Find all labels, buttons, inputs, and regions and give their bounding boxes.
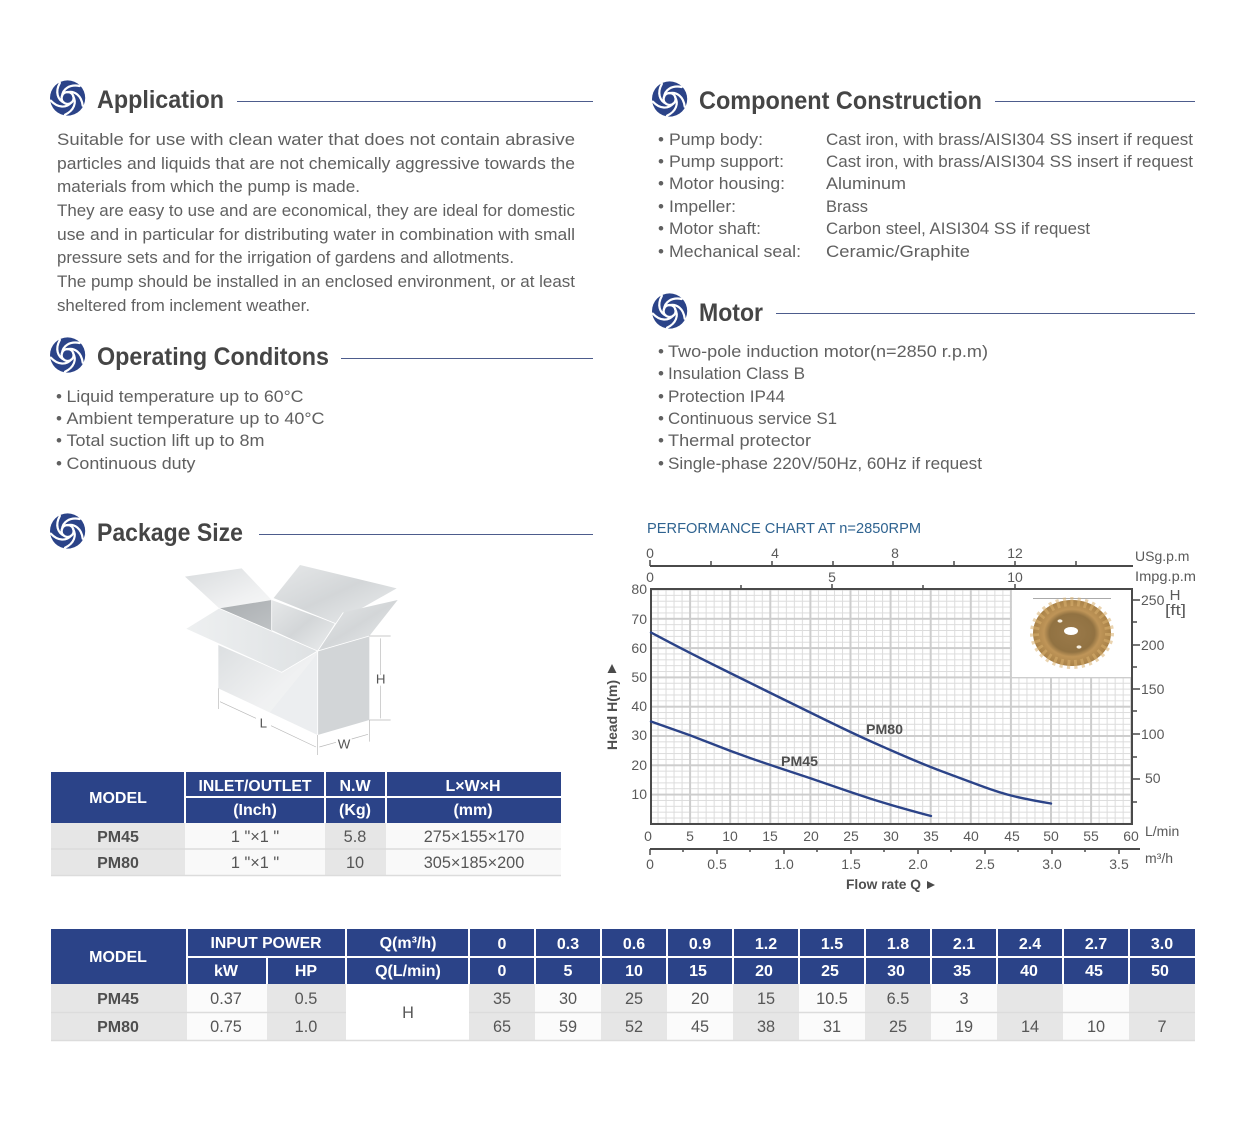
axis: flow in L/min: 0 bbox=[644, 828, 652, 844]
axis: flow in L/min: 30 bbox=[883, 828, 899, 844]
curve: PM45: PM45 bbox=[781, 753, 818, 769]
table: package dimensions: 10 bbox=[346, 854, 364, 872]
panel: motor bbox=[652, 293, 1195, 473]
table: performance data: 2.7 bbox=[1085, 936, 1107, 953]
heading: application: Application bbox=[97, 86, 224, 114]
table: performance data: 45 bbox=[691, 1018, 709, 1036]
axis: head in feet: 200 bbox=[1141, 637, 1165, 653]
table: performance data: 0 bbox=[498, 963, 507, 980]
list: components: Pump support: bbox=[669, 152, 784, 171]
table: performance data: 1.2 bbox=[755, 936, 777, 953]
table: performance data: 20 bbox=[755, 963, 773, 980]
list: components: Pump body: bbox=[669, 130, 763, 149]
table: performance data: 0.37 bbox=[210, 990, 242, 1008]
axis: head in feet: 250 bbox=[1141, 592, 1165, 608]
table: performance data: 10.5 bbox=[816, 990, 848, 1008]
axis: head in metres: Head H(m) bbox=[604, 680, 620, 750]
axis: USg.p.m: USg.p.m bbox=[1135, 548, 1189, 564]
list: motor: • bbox=[658, 364, 664, 383]
text block: application description: Suitable for use with clean water that does not contain abrasive bbox=[57, 130, 575, 149]
list: operating conditions: Ambient temperature up to 40°C bbox=[66, 409, 324, 428]
axis: flow in L/min: 20 bbox=[803, 828, 819, 844]
table: package dimensions: (mm) bbox=[453, 802, 493, 819]
list: operating conditions: • bbox=[56, 431, 62, 450]
table: performance data: 65 bbox=[493, 1018, 511, 1036]
table: performance data: 2.4 bbox=[1019, 936, 1041, 953]
table: performance data: 1.5 bbox=[821, 936, 843, 953]
table: package dimensions bbox=[51, 772, 561, 876]
table: package dimensions: PM45 bbox=[97, 829, 139, 846]
table: performance data: PM80 bbox=[97, 1019, 139, 1036]
axis: flow in m3/h bbox=[646, 849, 1173, 892]
list: operating conditions: Liquid temperature up to 60°C bbox=[66, 387, 304, 406]
table: package dimensions: 1 "×1 " bbox=[231, 854, 279, 872]
icon: motor logo bbox=[652, 293, 687, 329]
axis: head in metres bbox=[604, 581, 647, 802]
list: components: Carbon steel, AISI304 SS if request bbox=[826, 219, 1090, 238]
table: performance data: 38 bbox=[757, 1018, 775, 1036]
axis: Impg.p.m bbox=[646, 568, 1196, 589]
table: performance data: INPUT POWER bbox=[210, 935, 322, 952]
list: components: • bbox=[658, 130, 664, 149]
table: performance data: 52 bbox=[625, 1018, 643, 1036]
list: components: Cast iron, with brass/AISI304 SS insert if request bbox=[826, 130, 1193, 149]
list: motor: Continuous service S1 bbox=[668, 409, 837, 428]
axis: head in metres: 70 bbox=[631, 611, 647, 627]
table: package dimensions: 275×155×170 bbox=[424, 828, 524, 846]
axis: flow in m3/h: 2.0 bbox=[908, 856, 928, 872]
list: components: Motor housing: bbox=[669, 174, 785, 193]
text block: application description bbox=[57, 130, 575, 315]
curve: PM45 bbox=[651, 722, 931, 816]
table: package dimensions: INLET/OUTLET bbox=[198, 778, 312, 795]
list: components bbox=[658, 130, 1193, 261]
panel: application bbox=[50, 80, 593, 315]
icon: operating conditions logo bbox=[50, 337, 85, 373]
axis: flow in L/min: 40 bbox=[963, 828, 979, 844]
table: performance data: 3.0 bbox=[1151, 936, 1173, 953]
list: motor: • bbox=[658, 342, 664, 361]
table: performance data: 35 bbox=[493, 990, 511, 1008]
axis: Impg.p.m: 10 bbox=[1007, 569, 1023, 585]
text block: application description: pressure sets and for the irrigation of gardens and allotments. bbox=[57, 248, 514, 267]
table: performance data: 0.6 bbox=[623, 936, 645, 953]
list: motor: • bbox=[658, 409, 664, 428]
table: package dimensions: (Kg) bbox=[339, 802, 371, 819]
chart grid bbox=[650, 589, 1132, 824]
list: components: • bbox=[658, 197, 664, 216]
list: operating conditions: • bbox=[56, 409, 62, 428]
text block: application description: use and in particular for distributing water in combination with small bbox=[57, 225, 575, 244]
axis: flow in L/min: 25 bbox=[843, 828, 859, 844]
table: performance data: 1.8 bbox=[887, 936, 909, 953]
list: components: • bbox=[658, 219, 664, 238]
axis: USg.p.m: 4 bbox=[771, 545, 779, 561]
axis: head in feet: [ft] bbox=[1165, 602, 1186, 619]
list: components: Mechanical seal: bbox=[669, 242, 801, 261]
panel: performance chart bbox=[604, 520, 1196, 892]
icon: package size logo bbox=[50, 513, 85, 549]
list: components: Motor shaft: bbox=[669, 219, 761, 238]
axis: flow in m3/h: 1.0 bbox=[774, 856, 794, 872]
table: performance data: 31 bbox=[823, 1018, 841, 1036]
icon: component construction logo bbox=[652, 81, 687, 117]
table: performance data: 50 bbox=[1151, 963, 1169, 980]
axis: head in metres: 50 bbox=[631, 669, 647, 685]
table: performance data: 10 bbox=[1087, 1018, 1105, 1036]
text block: application description: They are easy to use and are economical, they are ideal for domestic bbox=[57, 201, 575, 220]
table: package dimensions: 1 "×1 " bbox=[231, 828, 279, 846]
list: components: • bbox=[658, 174, 664, 193]
table: performance data: 45 bbox=[1085, 963, 1103, 980]
plot frame bbox=[651, 589, 1132, 824]
table: package dimensions: 5.8 bbox=[344, 828, 366, 846]
axis: flow in L/min: 35 bbox=[923, 828, 939, 844]
table: performance data: 20 bbox=[691, 990, 709, 1008]
axis: Impg.p.m: 0 bbox=[646, 569, 654, 585]
axis: USg.p.m bbox=[646, 545, 1189, 566]
heading: package size: Package Size bbox=[97, 519, 243, 547]
axis: head in feet: 150 bbox=[1141, 681, 1165, 697]
icon: application logo bbox=[50, 80, 85, 116]
list: motor: Single-phase 220V/50Hz, 60Hz if request bbox=[668, 454, 982, 473]
table: performance data: H bbox=[402, 1004, 414, 1022]
table: performance data: 25 bbox=[889, 1018, 907, 1036]
table: performance data: 0 bbox=[498, 936, 507, 953]
list: operating conditions: • bbox=[56, 387, 62, 406]
heading: operating conditions: Operating Conditons bbox=[97, 343, 329, 371]
axis: flow in L/min: 50 bbox=[1043, 828, 1059, 844]
list: motor: Insulation Class B bbox=[668, 364, 805, 383]
axis: flow in L/min: L/min bbox=[1145, 823, 1179, 839]
axis: Impg.p.m: 5 bbox=[828, 569, 836, 585]
table: performance data: 35 bbox=[953, 963, 971, 980]
table: performance data: 25 bbox=[821, 963, 839, 980]
heading: motor: Motor bbox=[699, 299, 763, 327]
table: performance data: Q(m³/h) bbox=[380, 935, 436, 952]
table: performance data: 15 bbox=[689, 963, 707, 980]
axis: head in feet: H bbox=[1170, 587, 1180, 604]
list: components: Ceramic/Graphite bbox=[826, 242, 970, 261]
table: package dimensions: N.W bbox=[339, 778, 371, 795]
table: performance data: 1.0 bbox=[295, 1018, 317, 1036]
impeller photo bbox=[1012, 590, 1132, 677]
text block: application description: materials from which the pump is made. bbox=[57, 177, 360, 196]
list: motor: Protection IP44 bbox=[668, 387, 785, 406]
axis: head in metres: 20 bbox=[631, 757, 647, 773]
table: performance data: 0.9 bbox=[689, 936, 711, 953]
table: performance data: 14 bbox=[1021, 1018, 1039, 1036]
icon: open cardboard box with dimensions: L bbox=[260, 716, 267, 731]
axis: flow in L/min: 45 bbox=[1004, 828, 1020, 844]
text block: application description: particles and liquids that are not chemically aggressive towards the bbox=[57, 154, 575, 173]
list: motor: • bbox=[658, 454, 664, 473]
list: components: Impeller: bbox=[669, 197, 736, 216]
table: performance data: 6.5 bbox=[887, 990, 909, 1008]
axis: Impg.p.m: Impg.p.m bbox=[1135, 568, 1196, 584]
list: operating conditions: Total suction lift up to 8m bbox=[66, 431, 264, 450]
axis: head in metres: 40 bbox=[631, 698, 647, 714]
table: package dimensions: L×W×H bbox=[445, 778, 501, 795]
axis: flow in L/min: 60 bbox=[1123, 828, 1139, 844]
axis: head in feet: 100 bbox=[1141, 726, 1165, 742]
table: performance data: 25 bbox=[625, 990, 643, 1008]
list: motor bbox=[658, 342, 988, 473]
table: performance data: PM45 bbox=[97, 991, 139, 1008]
axis: head in feet: 50 bbox=[1145, 770, 1161, 786]
axis: flow in m3/h: 3.0 bbox=[1042, 856, 1062, 872]
list: components: Brass bbox=[826, 197, 868, 216]
table: performance data: 2.1 bbox=[953, 936, 975, 953]
list: components: Aluminum bbox=[826, 174, 906, 193]
list: motor: • bbox=[658, 387, 664, 406]
table: performance data: 30 bbox=[887, 963, 905, 980]
panel: package size bbox=[50, 513, 593, 876]
axis: flow in m3/h: 0.5 bbox=[707, 856, 727, 872]
table: package dimensions: MODEL bbox=[89, 790, 147, 807]
axis: USg.p.m: 12 bbox=[1007, 545, 1023, 561]
axis: flow in m3/h: 3.5 bbox=[1109, 856, 1129, 872]
table: performance data bbox=[51, 929, 1195, 1041]
list: operating conditions bbox=[56, 387, 324, 473]
table: package dimensions: (Inch) bbox=[233, 802, 277, 819]
table: performance data: 0.75 bbox=[210, 1018, 242, 1036]
table: performance data: 0.3 bbox=[557, 936, 579, 953]
axis: flow in L/min: 10 bbox=[722, 828, 738, 844]
heading: component construction: Component Construction bbox=[699, 87, 982, 115]
table: performance data: 40 bbox=[1020, 963, 1038, 980]
axis: flow in m3/h: 0 bbox=[646, 856, 654, 872]
curve: PM80 bbox=[651, 632, 1051, 804]
chart title: PERFORMANCE CHART AT n=2850RPM bbox=[647, 520, 921, 537]
table: performance data: 19 bbox=[955, 1018, 973, 1036]
list: operating conditions: • bbox=[56, 454, 62, 473]
text block: application description: The pump should be installed in an enclosed environment, or at least bbox=[57, 272, 575, 291]
axis: head in metres: 60 bbox=[631, 640, 647, 656]
table: performance data: Q(L/min) bbox=[375, 963, 441, 980]
axis: head in metres: 10 bbox=[631, 786, 647, 802]
axis: flow in L/min: 15 bbox=[762, 828, 778, 844]
axis: head in metres: 80 bbox=[631, 581, 647, 597]
table: performance data: 10 bbox=[625, 963, 643, 980]
axis: flow in m3/h: Flow rate Q bbox=[846, 876, 921, 892]
axis: flow in m3/h: m³/h bbox=[1145, 850, 1173, 866]
table: performance data: 0.5 bbox=[295, 990, 317, 1008]
axis: flow in L/min bbox=[644, 823, 1179, 844]
text block: application description: sheltered from inclement weather. bbox=[57, 296, 310, 315]
table: performance data: MODEL bbox=[89, 949, 147, 966]
icon: open cardboard box with dimensions: W bbox=[338, 736, 351, 751]
panel: operating conditions bbox=[50, 337, 593, 473]
list: motor: • bbox=[658, 431, 664, 450]
table: performance data: 7 bbox=[1157, 1018, 1167, 1036]
table: performance data: 30 bbox=[559, 990, 577, 1008]
axis: flow in L/min: 5 bbox=[686, 828, 694, 844]
list: operating conditions: Continuous duty bbox=[66, 454, 196, 473]
list: motor: Two-pole induction motor(n=2850 r.p.m) bbox=[668, 342, 988, 361]
list: components: • bbox=[658, 242, 664, 261]
table: performance data: 15 bbox=[757, 990, 775, 1008]
table: performance data: 3 bbox=[959, 990, 969, 1008]
axis: flow in m3/h: 2.5 bbox=[975, 856, 995, 872]
table: performance data: 5 bbox=[564, 963, 573, 980]
table: performance data: HP bbox=[295, 963, 317, 980]
axis: USg.p.m: 0 bbox=[646, 545, 654, 561]
list: components: • bbox=[658, 152, 664, 171]
table: package dimensions: 305×185×200 bbox=[424, 854, 524, 872]
table: performance data: 59 bbox=[559, 1018, 577, 1036]
axis: head in metres: 30 bbox=[631, 727, 647, 743]
axis: flow in m3/h: 1.5 bbox=[841, 856, 861, 872]
table: performance data: kW bbox=[214, 963, 239, 980]
list: motor: Thermal protector bbox=[668, 431, 811, 450]
axis: flow in L/min: 55 bbox=[1083, 828, 1099, 844]
axis: USg.p.m: 8 bbox=[891, 545, 899, 561]
curve: PM80: PM80 bbox=[866, 721, 903, 737]
icon: open cardboard box with dimensions: H bbox=[376, 672, 385, 687]
axis: head in feet bbox=[1132, 587, 1186, 802]
list: components: Cast iron, with brass/AISI304 SS insert if request bbox=[826, 152, 1193, 171]
icon: open cardboard box with dimensions bbox=[185, 565, 398, 755]
panel: component construction bbox=[652, 81, 1195, 261]
table: package dimensions: PM80 bbox=[97, 855, 139, 872]
